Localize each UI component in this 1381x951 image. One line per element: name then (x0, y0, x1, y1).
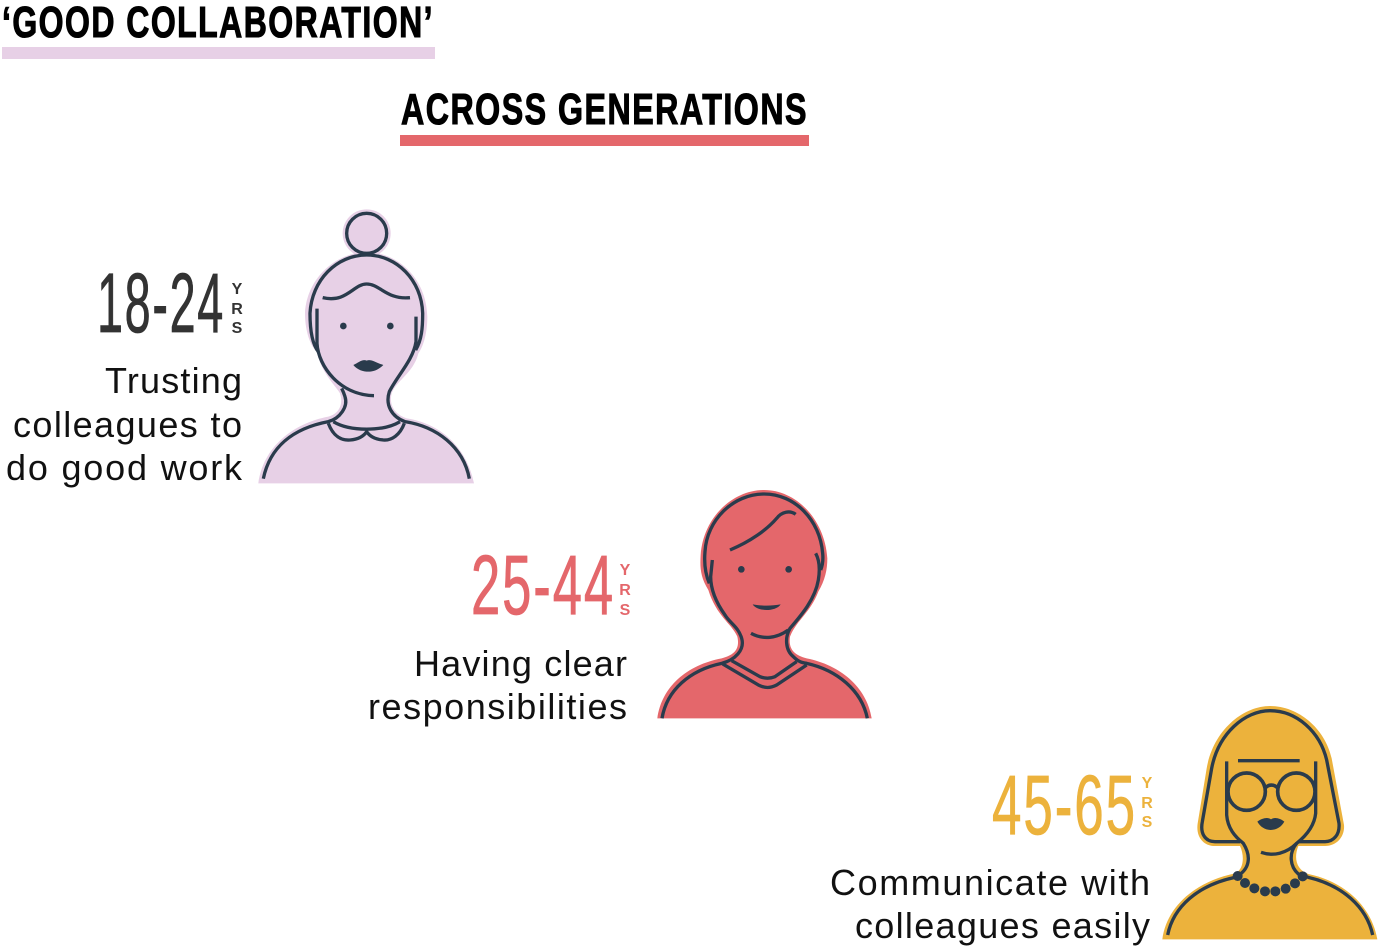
title line 2: ACROSS GENERATIONS (401, 85, 808, 134)
age label: 25-44: R (619, 582, 631, 599)
text: clear responsibilities (368, 643, 627, 727)
age label: 18-24: S (232, 320, 243, 337)
age label: 25-44: 25-44 (471, 538, 615, 632)
age label: 25-44 (471, 538, 631, 632)
text: trusting colleagues: do good work (6, 447, 243, 488)
age label: 18-24 (97, 256, 243, 350)
age label: 18-24: R (231, 301, 243, 318)
text: trusting colleagues: colleagues to (13, 404, 242, 445)
text: communicate easily: colleagues easily (855, 905, 1150, 946)
age label: 25-44: Y (620, 562, 631, 579)
text: clear responsibilities: Having clear (414, 643, 627, 684)
age label: 18-24: Y (232, 281, 243, 298)
text: trusting colleagues: Trusting (105, 360, 242, 401)
text: communicate easily (830, 862, 1150, 946)
age label: 45-65: S (1142, 814, 1153, 831)
age label: 18-24: 18-24 (97, 256, 225, 350)
age label: 25-44: S (620, 602, 631, 619)
age label: 45-65: 45-65 (992, 758, 1137, 852)
age label: 45-65: R (1141, 795, 1153, 812)
text: trusting colleagues (6, 360, 243, 488)
text: communicate easily: Communicate with (830, 862, 1150, 903)
icon: older woman with glasses (1162, 706, 1377, 939)
icon: young woman with bun (258, 209, 474, 483)
icon: young man (657, 490, 872, 718)
age label: 45-65: Y (1142, 775, 1153, 792)
title line 2 (400, 85, 809, 146)
text: clear responsibilities: responsibilities (368, 686, 627, 727)
title line 1 (2, 0, 435, 59)
